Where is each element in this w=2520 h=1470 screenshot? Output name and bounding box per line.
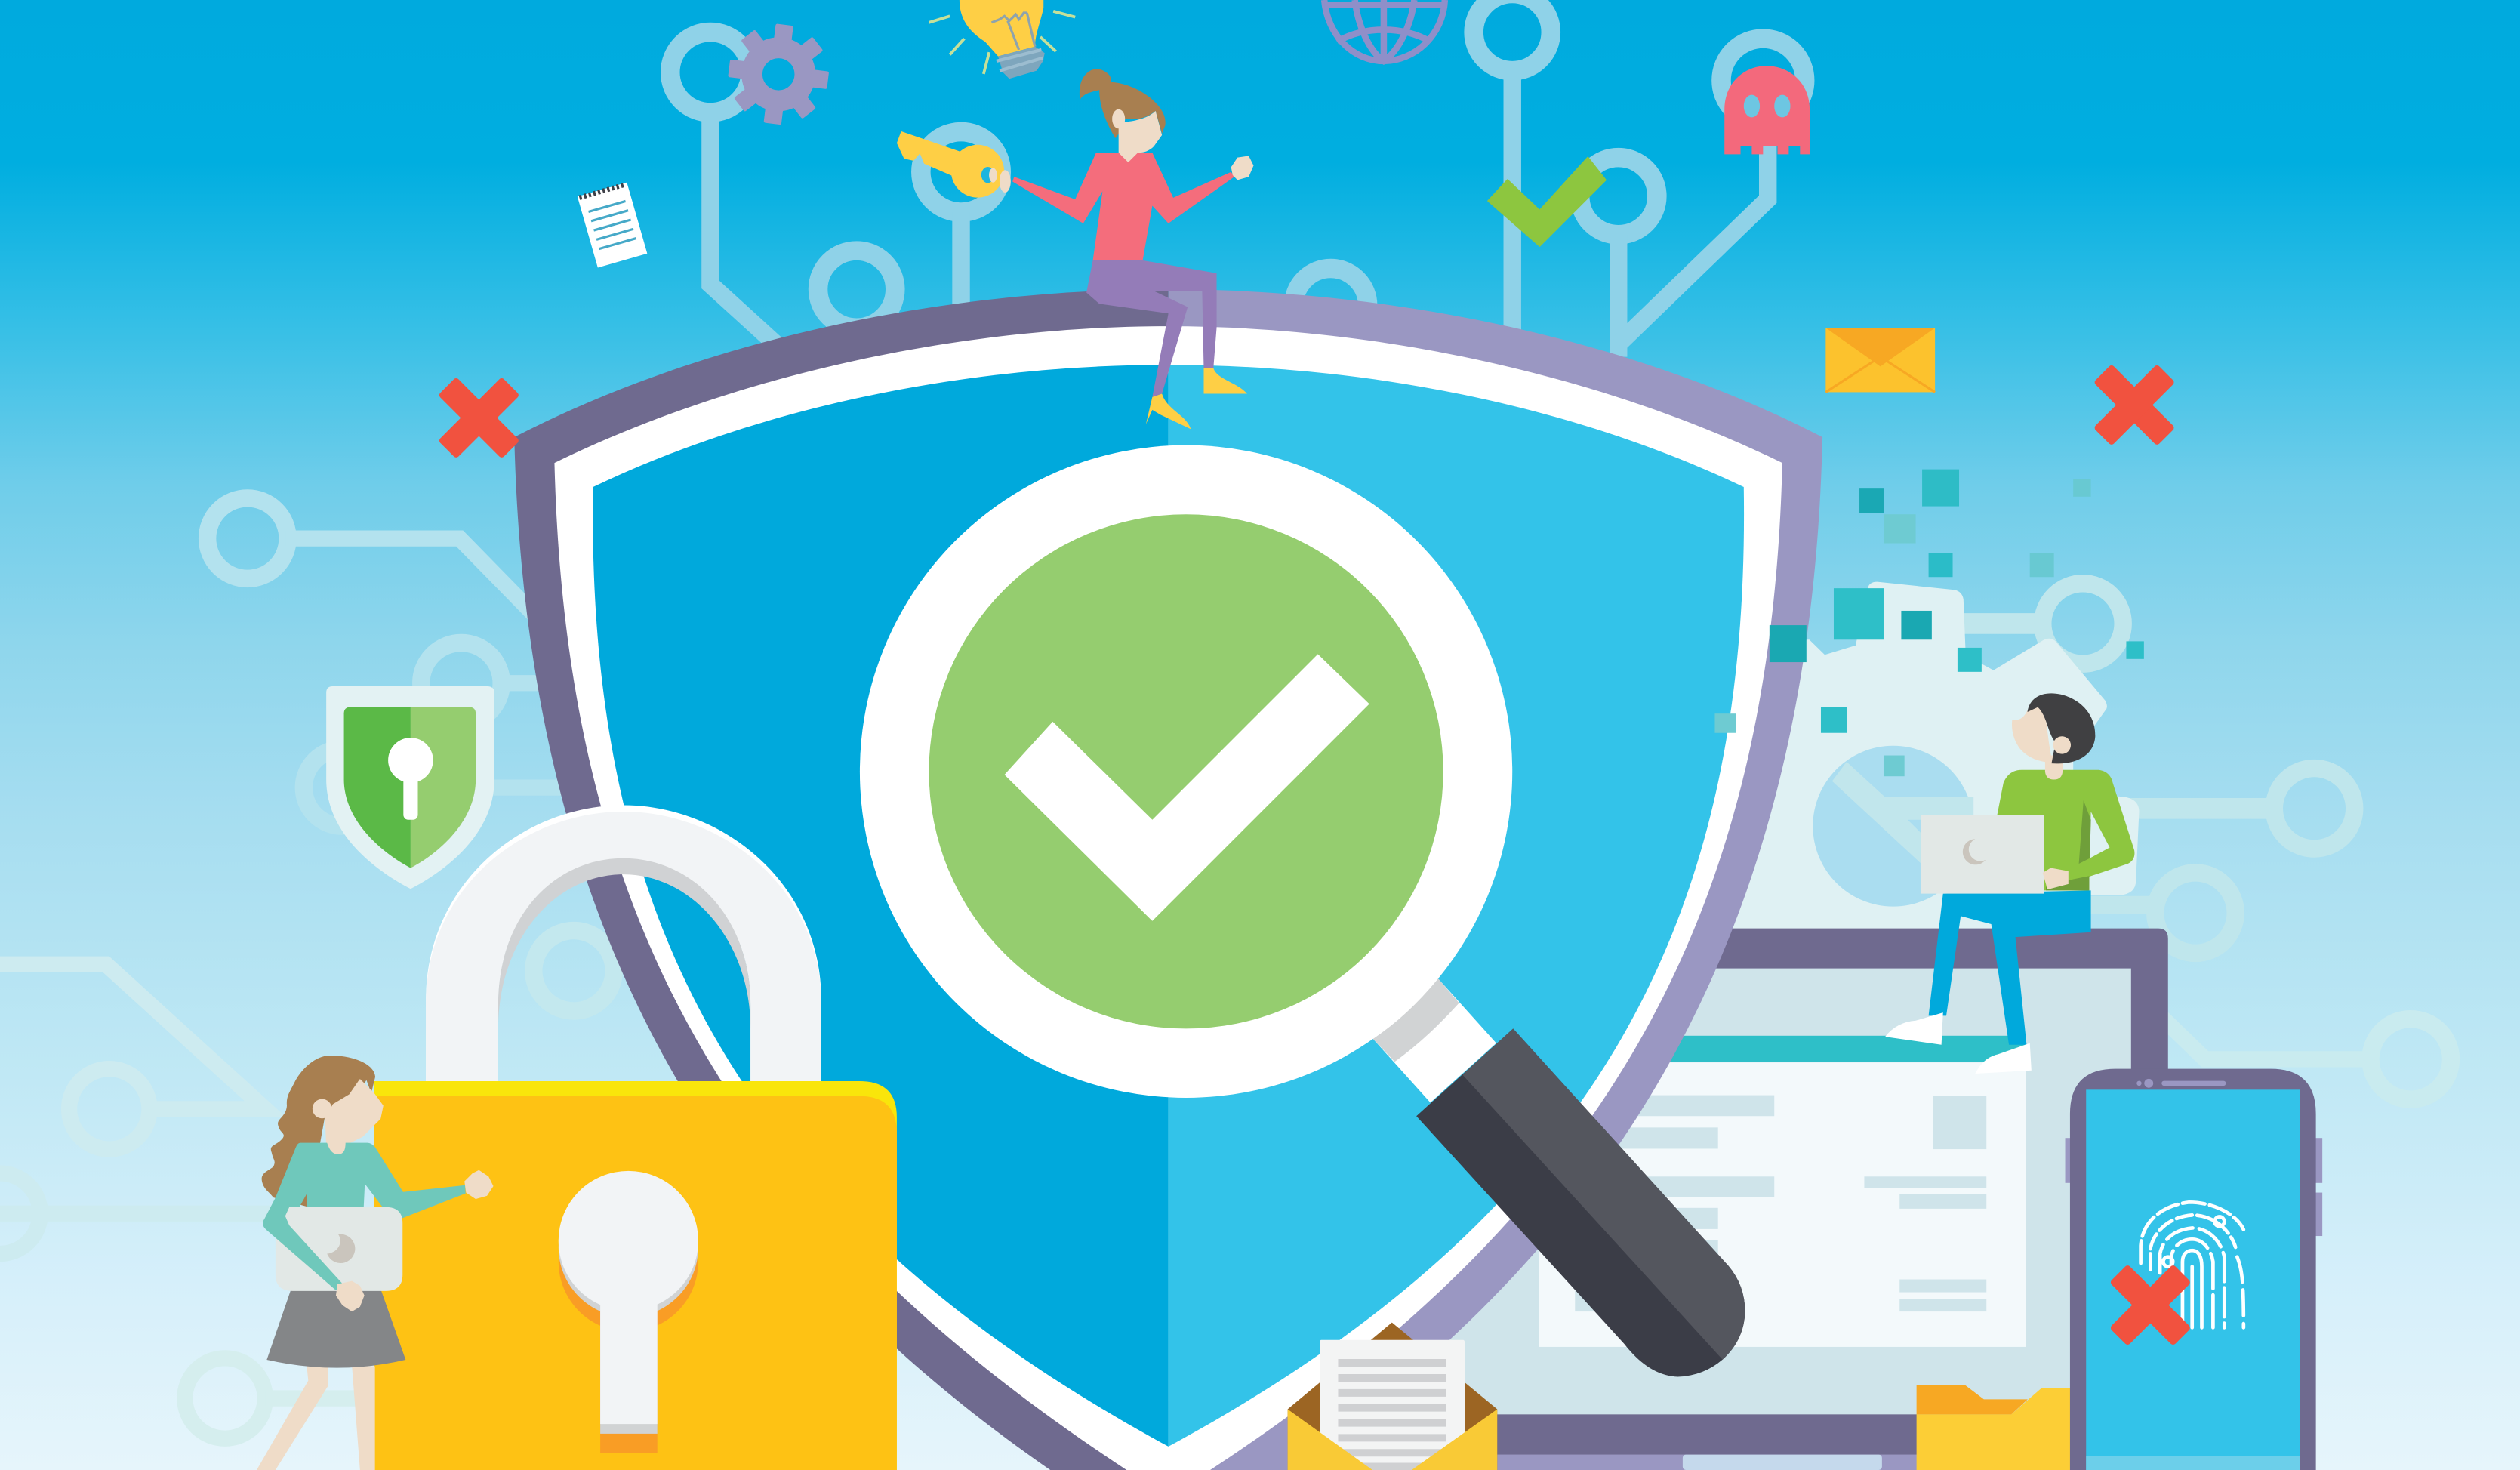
laptop: [1921, 815, 2044, 894]
folder: [1917, 1385, 2072, 1470]
shoes: [1885, 1012, 1943, 1045]
hand: [1231, 156, 1253, 180]
hair: [262, 1056, 375, 1207]
shield purple border left: [514, 289, 1169, 1470]
lens ring: [860, 445, 1512, 1098]
legs: [352, 1366, 375, 1470]
shield blue right: [1169, 365, 1744, 1447]
circuit lines: right: [1961, 584, 2451, 1099]
magnifying glass: [860, 445, 1745, 1377]
icon: fingerprint: [2141, 1202, 2244, 1327]
shield white band: [554, 326, 1782, 1470]
circuit lines: top: [670, 0, 1805, 357]
data squares: [1714, 470, 2144, 776]
keyhole: [559, 1171, 698, 1453]
icon: globe: [1324, 0, 1445, 61]
lower arm: [263, 1196, 342, 1290]
carried laptop: [263, 1196, 402, 1291]
icon: yellow envelope: [1825, 328, 1935, 392]
open envelope with letter: [1288, 1323, 1497, 1470]
shoes: [1203, 368, 1247, 394]
lock body: [374, 1081, 897, 1470]
pale background gear: [1704, 582, 2139, 932]
shield purple border right: [1169, 289, 1822, 1470]
icon: note paper: [578, 183, 647, 267]
icon: green check mark: [1488, 158, 1606, 246]
shackle: [426, 806, 821, 1093]
shirt and arms: [264, 1143, 466, 1225]
hand: [2043, 868, 2069, 889]
small green shield: [326, 686, 494, 889]
mobile phone: [2066, 1069, 2322, 1470]
phone speaker and camera: [2136, 1079, 2226, 1088]
hair: [1080, 69, 1166, 138]
hands: [336, 1281, 365, 1311]
person: woman carrying laptop: [257, 1056, 494, 1470]
trousers: [1929, 890, 2091, 1045]
icon: ghost: [1724, 66, 1810, 154]
padlock: [374, 806, 897, 1470]
icon: gear: [728, 23, 829, 125]
icon: red cross on phone: [2087, 1241, 2214, 1369]
handle: [1416, 1028, 1745, 1377]
handle collar: [1372, 978, 1496, 1102]
shirt: [1012, 153, 1234, 260]
trousers: [1086, 260, 1217, 397]
ear: [1112, 109, 1125, 128]
face and neck: [1119, 111, 1162, 162]
circuit lines: left: [208, 498, 614, 1011]
icon: red cross left: [415, 354, 543, 482]
person: man with laptop on monitor: [1885, 693, 2134, 1074]
shirt: [1997, 770, 2134, 890]
laptop monitor: [1253, 929, 2168, 1470]
monitor page: [1539, 1062, 2026, 1347]
icon: red cross right: [2071, 341, 2198, 469]
main shield: [514, 289, 1822, 1470]
fingers on key: [989, 168, 1011, 193]
shield blue left: [593, 365, 1169, 1447]
key: [897, 131, 1004, 198]
phone screen: [2086, 1089, 2300, 1470]
monitor teal header: [1543, 1036, 2025, 1062]
circuit lines: bottom left: [0, 964, 377, 1438]
lens green: [929, 514, 1443, 1028]
head and hair: [2012, 693, 2095, 779]
person: woman sitting on shield with key: [897, 69, 1253, 429]
icon: light bulb: [929, 0, 1075, 79]
check mark: [1005, 654, 1369, 921]
skirt: [266, 1290, 405, 1368]
face and neck: [313, 1080, 383, 1154]
